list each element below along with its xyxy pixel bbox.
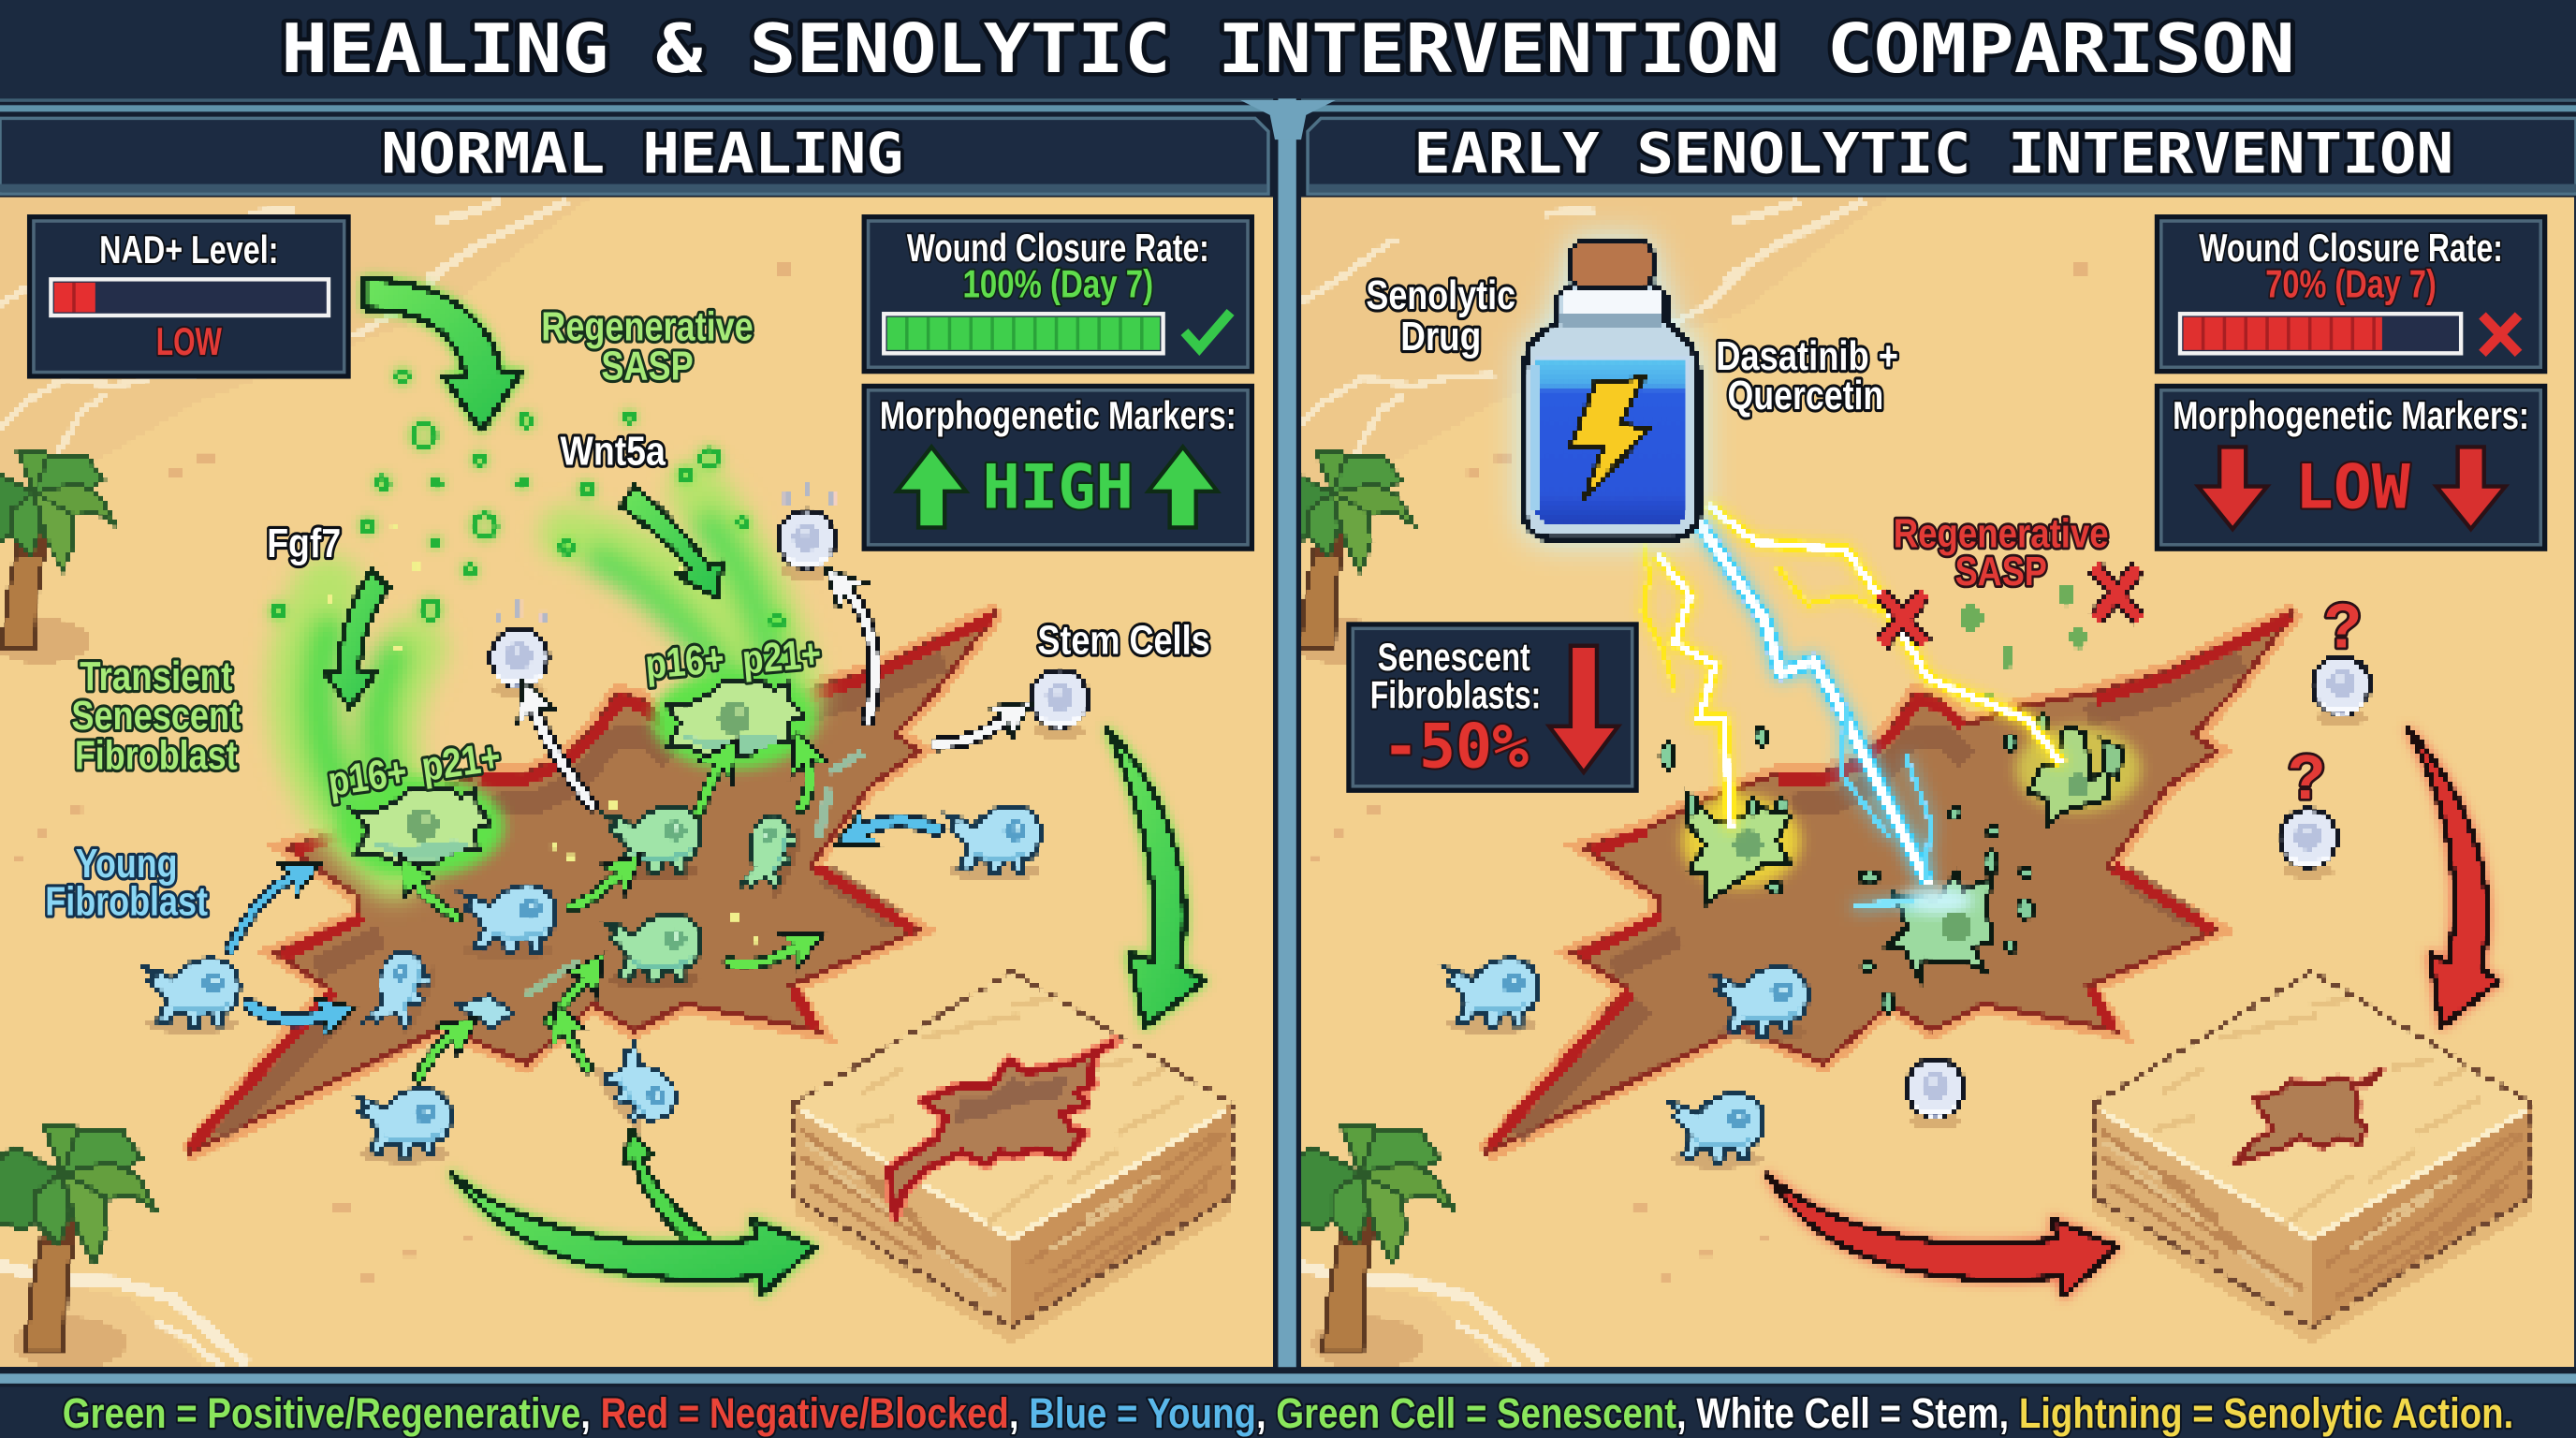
bolt icon: [1571, 378, 1649, 500]
label: Transient Senescent Fibroblast: Transient: [80, 653, 233, 699]
SASP green swirl glow: [303, 493, 792, 862]
palm tree upper: [0, 450, 117, 664]
palm tree lower: [1284, 1124, 1455, 1370]
arrow from Fgf7: [324, 570, 389, 708]
markers panel: normal: [864, 386, 1251, 549]
SASP particles: [271, 371, 783, 627]
pale SASP sparkles: [327, 522, 759, 943]
label: Transient Senescent Fibroblast: Fibroblast: [75, 732, 238, 778]
senescent reduction panel: [1349, 624, 1636, 790]
markers value: LOW: [2295, 452, 2411, 522]
young fibroblasts: [1444, 959, 1808, 1169]
closure value: 100% (Day 7): [962, 262, 1153, 306]
down arrow left: [2198, 447, 2267, 529]
activity sparks: [494, 481, 835, 623]
header: early senolytic intervention: [1308, 118, 2576, 194]
up arrow right: [1149, 447, 1218, 527]
check mark: [1184, 312, 1231, 348]
label: blocked Regenerative SASP: SASP: [1955, 549, 2047, 594]
label: Wnt5a: Wnt5a: [560, 429, 666, 475]
closure label: Wound Closure Rate:: [907, 226, 1209, 270]
big arrow: SASP release: [365, 279, 522, 431]
yellow lightning right: [1707, 505, 2062, 764]
label: Fgf7: Fgf7: [267, 521, 341, 566]
label: Young Fibroblast: Fibroblast: [45, 879, 208, 925]
wound closure panel: normal: [864, 217, 1251, 372]
up arrow left: [897, 447, 966, 527]
label: Dasatinib + Quercetin: [1716, 333, 1898, 418]
label: Young Fibroblast: Young: [76, 841, 178, 887]
NAD bar: [51, 279, 329, 315]
wound closure panel: senolytic: [2157, 217, 2545, 372]
X mark: [2482, 315, 2519, 353]
heading text: EARLY SENOLYTIC INTERVENTION: [1413, 122, 2453, 186]
young fibroblasts: [144, 753, 1041, 1164]
label: Dasatinib + Quercetin: Dasatinib +: [1716, 333, 1898, 379]
label: p21+ left: p21+: [419, 734, 504, 790]
closure bar: [884, 314, 1164, 353]
palm tree lower: [0, 1124, 157, 1370]
liquid: [1536, 359, 1687, 526]
red arrow to cube top: [2408, 729, 2499, 1027]
white migration arrows: [534, 592, 1005, 805]
markers label: Morphogenetic Markers:: [880, 393, 1237, 437]
exploding senescent cell centre: [1888, 871, 1993, 979]
heading text: NORMAL HEALING: [381, 122, 903, 186]
stem cell 1: [490, 628, 548, 698]
potion bottle: [1525, 242, 1699, 539]
label: Young Fibroblast: [45, 841, 208, 925]
label: Stem Cells: Stem Cells: [1037, 618, 1210, 664]
stem cell 3: [1031, 669, 1089, 740]
stem cell with question 1: [2312, 656, 2370, 726]
label: p16+ right: p16+: [643, 636, 726, 688]
label: Senolytic Drug: [1366, 272, 1515, 360]
NAD label: NAD+ Level:: [99, 227, 278, 271]
NAD value: LOW: [156, 319, 222, 363]
yellow lightning left: [1643, 546, 1732, 829]
label: p16+ left: p16+: [325, 749, 410, 805]
red X marks on SASP: [1881, 567, 2139, 644]
cyan lightning: [1699, 522, 1930, 907]
down arrow: [1549, 646, 1618, 772]
cork: [1571, 242, 1653, 287]
down arrow right: [2437, 447, 2506, 529]
label: Senolytic Drug: Drug: [1400, 314, 1481, 360]
label: blocked Regenerative SASP: [1894, 510, 2109, 594]
green migration arrows: [417, 762, 810, 1078]
label: Regenerative SASP: [541, 303, 754, 389]
reduction label: Senescent: [1378, 635, 1530, 679]
senescent fibroblast left: [340, 777, 505, 875]
cube small wound: [2234, 1070, 2382, 1164]
exploding senescent cell right: [2016, 726, 2141, 825]
header: normal healing: [0, 118, 1268, 194]
arrow: cells to cube: [452, 1173, 815, 1295]
label: Regenerative SASP: Regenerative: [541, 303, 754, 349]
panel: normal healing scene: [0, 198, 1273, 1370]
reduction label line 2: Fibroblasts:: [1370, 672, 1541, 716]
title bar: [0, 0, 2576, 98]
title: HEALING & SENOLYTIC INTERVENTION COMPARISON: [281, 9, 2295, 88]
legend: Green = Positive/Regenerative, Red = Negative/Blocked, Blue = Young, Green Cell = Senescent, White Cell = Stem, Lightning = Senolytic Action.: [63, 1389, 2513, 1437]
neck band: [1562, 291, 1661, 312]
arrow: senescent to cube: [1107, 729, 1204, 1027]
NAD+ panel: [30, 217, 348, 376]
red arrow to cube left: [1767, 1175, 2117, 1297]
stem cell idle: [1907, 1059, 1964, 1129]
arrow: up to young cell: [622, 1129, 718, 1252]
palm tree upper: [1266, 450, 1414, 664]
label: p21+ right: p21+: [740, 631, 823, 683]
bottle body: [1525, 285, 1699, 539]
question mark 1: ?: [2323, 593, 2362, 662]
closure bar: [2180, 314, 2461, 353]
senescent fibroblast right: [652, 670, 816, 769]
blue migration arrows: [230, 821, 936, 1020]
label: Dasatinib + Quercetin: Quercetin: [1727, 373, 1883, 418]
label: Transient Senescent Fibroblast: Senescent: [71, 693, 241, 739]
cube wound: [889, 1042, 1116, 1214]
closure value: 70% (Day 7): [2265, 262, 2437, 306]
markers panel: senolytic: [2157, 386, 2545, 549]
exploding senescent cell left: [1682, 792, 1801, 903]
label: blocked Regenerative SASP: Regenerative: [1894, 510, 2109, 556]
panel: senolytic scene: [1266, 198, 2576, 1370]
cube: healed wound result: [794, 971, 1232, 1344]
arrow from Wnt5a: [621, 487, 723, 598]
label: Senolytic Drug: Senolytic: [1366, 272, 1515, 318]
cell fragments: [1661, 583, 2086, 1012]
glass side highlight: [1530, 365, 1540, 509]
neck shade: [1560, 312, 1662, 327]
cube: partial closure result: [2093, 971, 2532, 1344]
stem cell 2: [778, 510, 835, 580]
label: Transient Senescent Fibroblast: [71, 653, 241, 778]
wound: normal healing: [187, 611, 997, 1153]
wound: senolytic: [1486, 611, 2295, 1153]
markers value: HIGH: [983, 452, 1134, 522]
label: Regenerative SASP: SASP: [601, 343, 694, 389]
stem cell with question 2: [2279, 809, 2337, 879]
question mark 2: ?: [2288, 743, 2326, 813]
reduction value: -50%: [1383, 712, 1529, 783]
